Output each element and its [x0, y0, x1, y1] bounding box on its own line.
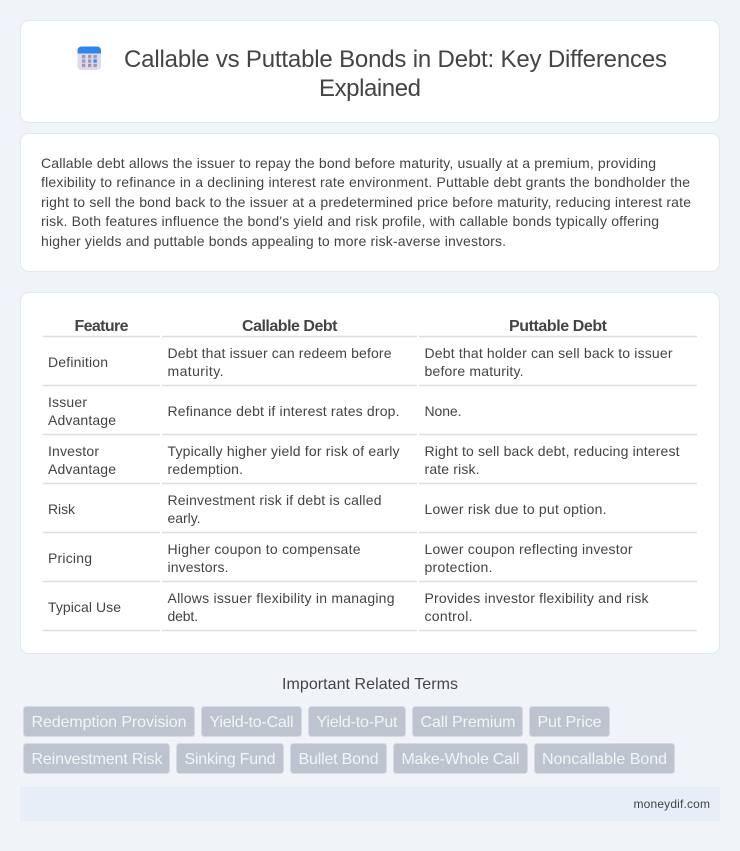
row: typical use [43, 590, 697, 630]
row: pricing: Higher coupon to compensate [168, 541, 361, 557]
row: risk: Reinvestment risk if debt is called [168, 492, 382, 508]
table header: Callable Debt [242, 318, 338, 335]
tags: related terms: Bullet Bond [298, 751, 378, 768]
text block: summary [41, 155, 691, 249]
row: risk: Risk [48, 501, 76, 517]
text block: summary: higher yields and puttable bonds appealing to more risk-averse investors. [41, 233, 506, 249]
table header: Feature [74, 318, 129, 335]
table header: Puttable Debt [509, 318, 608, 335]
row: pricing: Lower coupon reflecting investor [424, 541, 633, 557]
row: risk [43, 492, 697, 532]
row: definition: Debt that issuer can redeem before [168, 345, 392, 361]
title: Callable vs Puttable Bonds in Debt: Key Differences [124, 46, 667, 73]
row: typical use: Typical Use [48, 599, 121, 615]
heading: important related terms: Important Related Terms [282, 676, 458, 693]
text block: summary: right to sell the bond back to the issuer at a predetermined price before maturity, reducing interest rate [41, 194, 691, 210]
title [124, 46, 667, 102]
tags: related terms: Noncallable Bond [542, 751, 667, 768]
table header [43, 318, 697, 336]
tags: related terms: Call Premium [420, 714, 516, 731]
tags: related terms: Yield-to-Call [210, 714, 294, 731]
tags: related terms: Put Price [538, 714, 602, 731]
icon: calendar [78, 46, 101, 70]
tags: related terms: Redemption Provision [32, 714, 186, 731]
text block: summary: flexibility to refinance in a declining interest rate environment. Puttable debt grants the bondholder the [41, 174, 690, 190]
panel: title card [20, 20, 720, 122]
row: issuer advantage: None. [424, 403, 462, 419]
row: typical use: control. [424, 608, 472, 624]
row: definition: Definition [48, 354, 108, 370]
tags: related terms: Make-Whole Call [402, 751, 520, 768]
row: issuer advantage: Refinance debt if interest rates drop. [168, 403, 400, 419]
row: typical use: debt. [168, 608, 198, 624]
row: definition [43, 345, 697, 386]
tags: related terms: Yield-to-Put [316, 714, 398, 731]
row: typical use: Provides investor flexibility and risk [424, 590, 650, 606]
tags: related terms: Sinking Fund [184, 751, 276, 768]
row: investor advantage [43, 443, 697, 484]
text block: summary: risk. Both features influence the bond's yield and risk profile, with callable bonds typically offering [41, 213, 659, 229]
row: investor advantage: Right to sell back debt, reducing interest [424, 443, 680, 459]
footer [20, 787, 720, 821]
tags: related terms [24, 706, 674, 774]
row: risk: early. [168, 510, 200, 526]
row: issuer advantage: Issuer [48, 394, 87, 410]
row: risk: Lower risk due to put option. [424, 501, 606, 517]
title: Explained [319, 75, 421, 102]
row: pricing: protection. [424, 559, 492, 575]
row: investor advantage: rate risk. [424, 461, 480, 477]
row: definition: maturity. [168, 363, 224, 379]
panel: intro paragraph [20, 134, 720, 272]
row: issuer advantage [43, 394, 697, 434]
row: issuer advantage: Advantage [48, 412, 116, 428]
row: pricing [43, 541, 697, 582]
row: definition: Debt that holder can sell back to issuer [424, 345, 673, 361]
row: investor advantage: Advantage [48, 461, 116, 477]
footer: moneydif.com [634, 797, 710, 811]
row: typical use: Allows issuer flexibility in managing [168, 590, 394, 606]
row: investor advantage: redemption. [168, 461, 243, 477]
row: pricing: Pricing [48, 550, 92, 566]
row: investor advantage: Investor [48, 443, 99, 459]
tags: related terms: Reinvestment Risk [32, 751, 164, 768]
row: investor advantage: Typically higher yield for risk of early [168, 443, 400, 459]
panel: comparison table [20, 292, 720, 654]
row: definition: before maturity. [424, 363, 524, 379]
text block: summary: Callable debt allows the issuer to repay the bond before maturity, usually at a premium, providing [41, 155, 656, 171]
row: pricing: investors. [168, 559, 228, 575]
